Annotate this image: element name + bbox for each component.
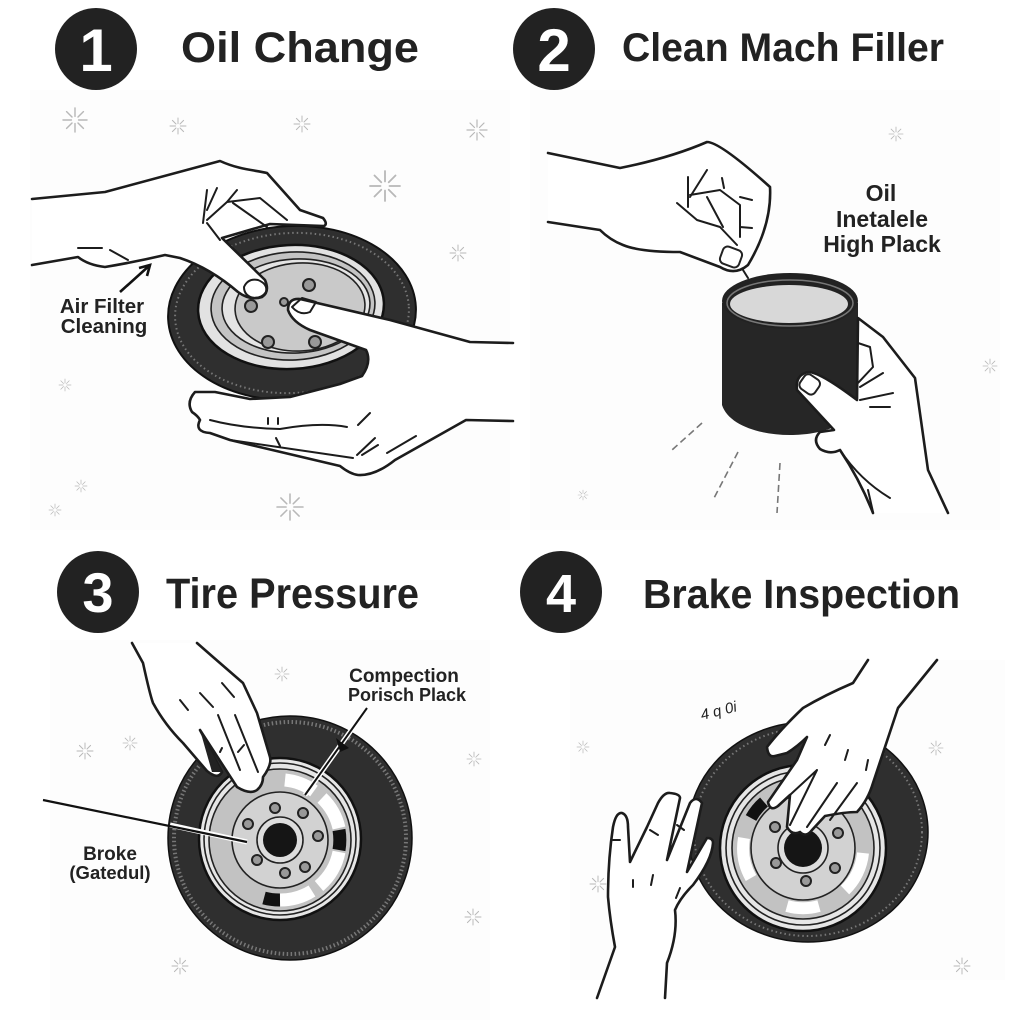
icon: tire 4: [688, 722, 928, 942]
icon: tire 3: [168, 716, 412, 960]
motion lines: [672, 423, 780, 513]
decorative sparkles 2: [578, 127, 997, 500]
decorative sparkles 4: [577, 741, 970, 974]
badge 1: 1: [79, 17, 113, 84]
callout: air filter cleaning: [60, 265, 150, 338]
decorative sparkles 1: [49, 108, 487, 520]
fingernail: [797, 372, 822, 397]
small scribble label: 4 q 0i: [699, 698, 739, 724]
badge 4: 4: [546, 564, 576, 624]
fingernail: [292, 298, 316, 313]
heading: oil change: Oil Change: [181, 24, 419, 72]
panel 3: tire pressure: [43, 551, 481, 974]
callout: compection porisch plack: [305, 666, 467, 795]
callout: oil label: Inetalele: [836, 206, 928, 232]
icon: filter canister: [722, 273, 858, 435]
decorative sparkles 3: [77, 667, 481, 974]
callout: broke gatedul: Broke: [83, 844, 137, 865]
icon: upper hand 2: [548, 142, 770, 278]
fingernail: [719, 245, 743, 269]
icon: lower hand 4: [597, 793, 713, 998]
callout: oil label: High Plack: [823, 231, 941, 257]
callout: compection porisch plack: Compection: [349, 666, 459, 687]
callout: air filter cleaning: Cleaning: [61, 315, 147, 338]
badge 2: [513, 8, 595, 90]
heading: tire pressure: Tire Pressure: [166, 570, 419, 618]
heading: brake inspection: Brake Inspection: [643, 571, 960, 617]
icon: upper hand 1: [32, 161, 326, 298]
badge 2: 2: [537, 17, 571, 84]
icon: lower hand 2: [797, 318, 948, 513]
panel 4: brake inspection: [520, 551, 970, 998]
callout: broke gatedul: [43, 800, 247, 883]
icon: top hand 4: [767, 660, 937, 835]
icon: hand 3: [132, 643, 270, 792]
icon: tire 1: [164, 220, 420, 406]
badge 4: [520, 551, 602, 633]
callout: oil label: Oil: [866, 180, 896, 206]
badge 3: 3: [82, 561, 114, 624]
callout: air filter cleaning: Air Filter: [60, 295, 144, 318]
heading: clean mach filler: Clean Mach Filler: [622, 26, 944, 70]
callout: broke gatedul: (Gatedul): [69, 862, 151, 883]
callout: oil label: [823, 180, 941, 257]
callout: compection porisch plack: Porisch Plack: [348, 685, 467, 705]
badge 1: [55, 8, 137, 90]
icon: lower hand 1: [190, 298, 513, 475]
fingernail: [244, 280, 266, 298]
panel 1: oil change: [32, 8, 513, 520]
badge 3: [57, 551, 139, 633]
panel 2: filter: [513, 8, 997, 513]
